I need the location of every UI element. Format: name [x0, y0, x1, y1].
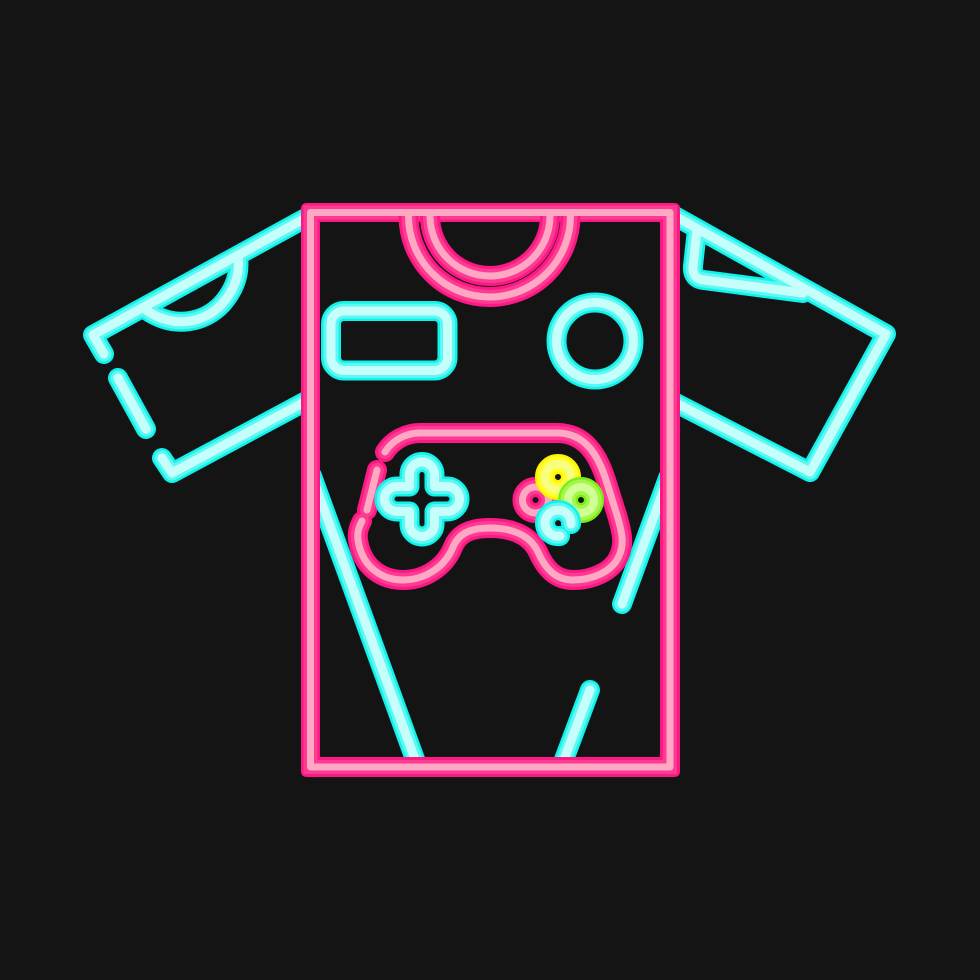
- game controller: [358, 433, 622, 580]
- shirt body frame: [301, 203, 680, 777]
- controller outline: [358, 433, 622, 580]
- yellow button: [545, 464, 571, 490]
- d-pad: [384, 462, 459, 536]
- badge: circle: [556, 302, 634, 380]
- pink button: [522, 487, 548, 513]
- right body side line: [622, 478, 668, 604]
- right sleeve: [670, 213, 886, 472]
- bottom body short line: [562, 690, 590, 765]
- left body side line: [312, 476, 416, 762]
- cyan button: [545, 510, 571, 536]
- collar: [408, 216, 570, 297]
- green button: [568, 487, 594, 513]
- left sleeve: [93, 216, 310, 473]
- badge: rounded rectangle: [331, 311, 448, 370]
